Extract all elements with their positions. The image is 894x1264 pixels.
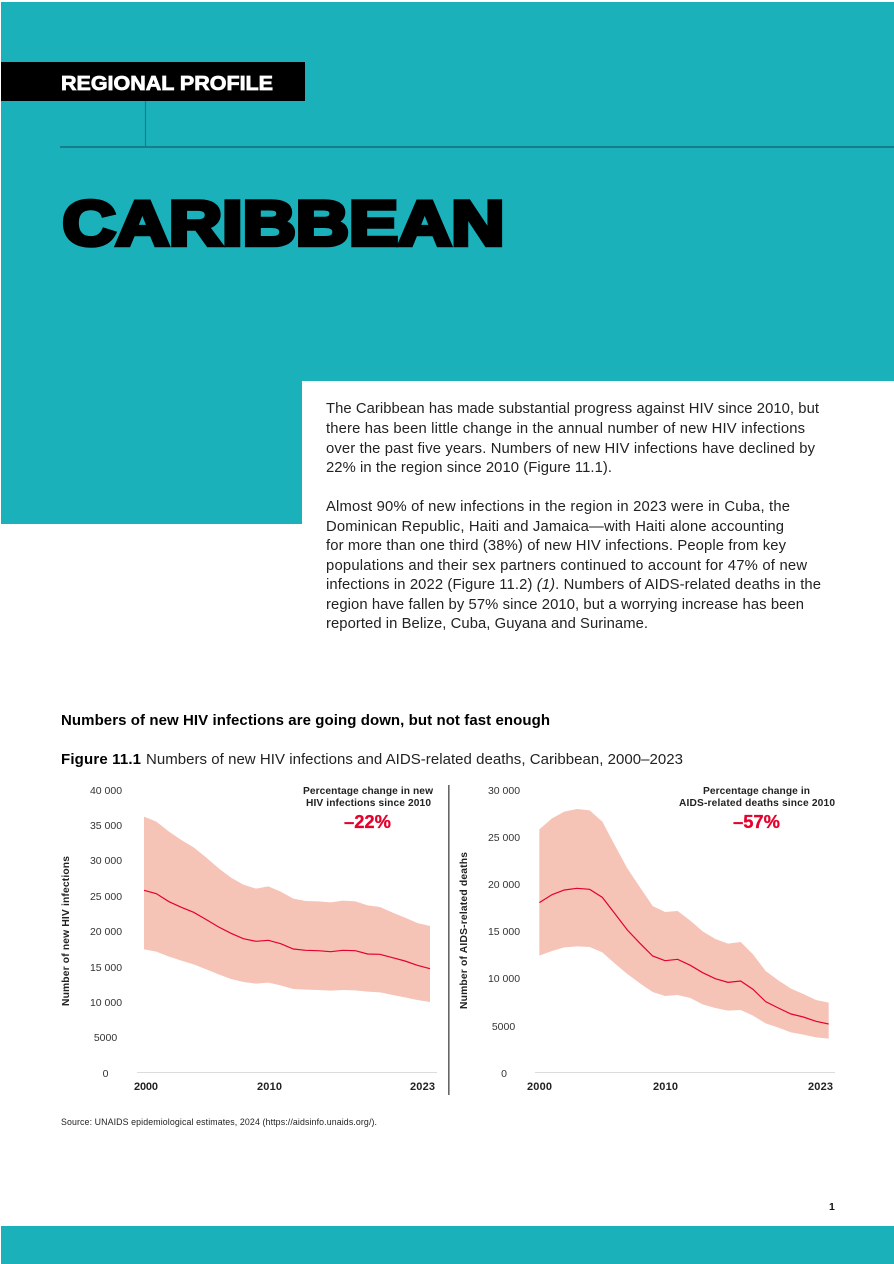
y axis labels: new HIV infections: 25 000 (90, 891, 122, 903)
y axis labels: new HIV infections: 40 000 (90, 785, 122, 797)
y axis labels: new HIV infections: 10 000 (90, 997, 122, 1009)
text block: introduction: The Caribbean has made substantial progress against HIV since 2010, but (326, 401, 819, 417)
label: regional profile: REGIONAL PROFILE (61, 72, 273, 95)
y axis labels: new HIV infections: 5000 (94, 1032, 117, 1044)
text block: introduction: Dominican Republic, Haiti and Jamaica—with Haiti alone accounting (326, 519, 784, 535)
uncertainty band: AIDS-related deaths (539, 809, 829, 1039)
callout: percentage change in new HIV infections: HIV infections since 2010 (306, 798, 431, 809)
text block: introduction: populations and their sex partners continued to account for 47% of new (326, 558, 807, 574)
title: CARIBBEAN (62, 189, 504, 259)
text block: introduction: over the past five years. Numbers of new HIV infections have declined by (326, 441, 816, 457)
callout: percentage change in new HIV infections: –22% (344, 812, 391, 832)
y axis labels: AIDS-related deaths (488, 785, 520, 1080)
y axis labels: new HIV infections: 0 (103, 1068, 109, 1080)
x axis: new HIV infections: 2023 (410, 1081, 435, 1093)
text block: introduction: Almost 90% of new infections in the region in 2023 were in Cuba, the (326, 499, 790, 515)
divider between charts (448, 785, 450, 1095)
y axis title: AIDS-related deaths: Number of AIDS-related deaths (459, 852, 470, 1009)
x axis: AIDS-related deaths: 2023 (808, 1081, 833, 1093)
trend line: new HIV infections (144, 890, 430, 969)
figure caption: Figure 11.1 (61, 751, 141, 768)
y axis labels: new HIV infections: 35 000 (90, 820, 122, 832)
chart: new HIV infections (61, 785, 437, 1093)
text block: introduction (326, 401, 821, 632)
text block: introduction: infections in 2022 (Figure 11.2) (1). Numbers of AIDS-related deaths in the (326, 577, 821, 593)
callout: percentage change in AIDS-related deaths: –57% (733, 812, 780, 832)
y axis labels: AIDS-related deaths: 15 000 (488, 926, 520, 938)
y axis labels: AIDS-related deaths: 10 000 (488, 973, 520, 985)
source note: Source: UNAIDS epidemiological estimates, 2024 (https://aidsinfo.unaids.org/). (61, 1117, 377, 1127)
text block: introduction: for more than one third (38%) of new HIV infections. People from key (326, 538, 787, 554)
x axis: new HIV infections (134, 1072, 437, 1093)
label: regional profile (1, 62, 305, 101)
y axis labels: new HIV infections: 20 000 (90, 926, 122, 938)
y axis labels: new HIV infections: 15 000 (90, 962, 122, 974)
text block: introduction: there has been little change in the annual number of new HIV infections (326, 421, 805, 437)
y axis labels: new HIV infections (90, 785, 122, 1080)
y axis labels: AIDS-related deaths: 25 000 (488, 832, 520, 844)
callout: percentage change in new HIV infections: Percentage change in new (303, 786, 433, 797)
y axis labels: AIDS-related deaths: 0 (501, 1068, 507, 1080)
panel: teal header (1, 2, 894, 524)
trend line: AIDS-related deaths (539, 888, 829, 1024)
figure caption: Numbers of new HIV infections and AIDS-related deaths, Caribbean, 2000–2023 (146, 751, 683, 768)
panel: teal footer band (1, 1226, 894, 1264)
y axis labels: AIDS-related deaths: 20 000 (488, 879, 520, 891)
x axis: AIDS-related deaths: 2010 (653, 1081, 678, 1093)
heading: chart section: Numbers of new HIV infections are going down, but not fast enough (61, 712, 550, 729)
text block: introduction: region have fallen by 57% since 2010, but a worrying increase has been (326, 597, 804, 613)
x axis: AIDS-related deaths: 2000 (527, 1081, 552, 1093)
chart: AIDS-related deaths (459, 785, 835, 1093)
text block: introduction: 22% in the region since 2010 (Figure 11.1). (326, 460, 612, 476)
callout: percentage change in AIDS-related deaths (679, 786, 835, 832)
x axis: new HIV infections: 2000 (134, 1081, 158, 1093)
text block: introduction: reported in Belize, Cuba, Guyana and Suriname. (326, 616, 648, 632)
callout: percentage change in AIDS-related deaths: AIDS-related deaths since 2010 (679, 798, 835, 809)
callout: percentage change in new HIV infections (303, 786, 433, 832)
y axis labels: AIDS-related deaths: 5000 (492, 1021, 515, 1033)
uncertainty band: new HIV infections (144, 817, 430, 1002)
page number: 1 (829, 1201, 835, 1213)
x axis: new HIV infections: 2010 (257, 1081, 282, 1093)
x axis: AIDS-related deaths (527, 1072, 835, 1093)
callout: percentage change in AIDS-related deaths: Percentage change in (703, 786, 810, 797)
y axis labels: AIDS-related deaths: 30 000 (488, 785, 520, 797)
y axis labels: new HIV infections: 30 000 (90, 855, 122, 867)
y axis title: new HIV infections: Number of new HIV infections (61, 856, 72, 1006)
